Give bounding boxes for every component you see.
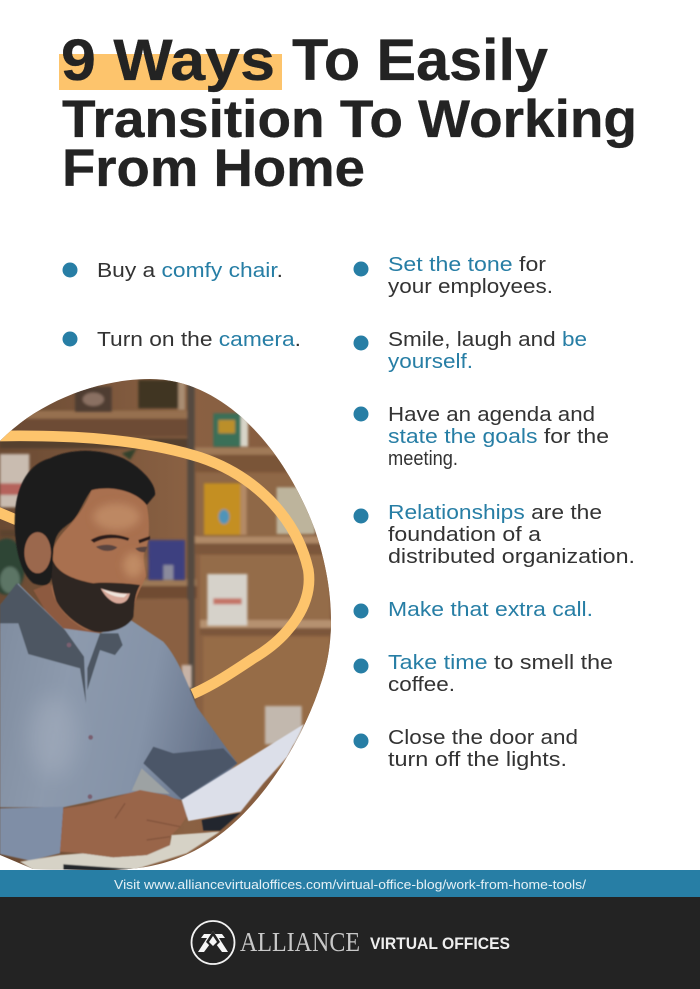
- tip: agenda: [354, 404, 609, 470]
- tip: relationships: distributed organization.: [388, 546, 635, 568]
- tip: relationships: foundation of a: [388, 524, 542, 546]
- url bar: [0, 870, 700, 897]
- smile: [101, 588, 130, 603]
- knuckle lines: [115, 803, 180, 840]
- tip: comfy chair: Buy a comfy chair .: [97, 260, 283, 282]
- shirt: [0, 583, 237, 807]
- eyes: [96, 545, 147, 552]
- tip: set the tone: Set the tone for: [388, 254, 546, 276]
- hand: [60, 790, 187, 857]
- title line 1 highlighted words: 9 Ways: [61, 28, 275, 93]
- neck: [34, 582, 98, 633]
- left tips list: [62, 260, 301, 351]
- shirt buttons: [67, 643, 93, 799]
- tip: agenda: Have an agenda and: [388, 404, 595, 426]
- blurred books: [0, 380, 315, 744]
- desk: [20, 832, 220, 870]
- forehead highlight: [93, 503, 140, 530]
- collar: [0, 583, 123, 703]
- title: [59, 28, 637, 198]
- title line 3: From Home: [62, 139, 365, 198]
- hair: [15, 451, 155, 585]
- tip: agenda: meeting.: [388, 448, 458, 470]
- tip: relationships: [354, 502, 635, 568]
- eyebrows: [91, 535, 150, 543]
- tip: be yourself: Smile, laugh and be: [388, 329, 587, 351]
- gap between arm and body: [132, 768, 170, 794]
- title line 1 remaining words: To Easily: [292, 28, 548, 93]
- right tips list: [354, 254, 635, 771]
- logo wordmark: Virtual Offices: VIRTUAL OFFICES: [370, 934, 510, 953]
- url text: Visit www.alliancevirtualoffices.com/virtual-office-blog/work-from-home-tools/: [114, 878, 587, 892]
- footer: [0, 897, 700, 989]
- tip: set the tone: [354, 254, 553, 298]
- beard: [51, 557, 140, 632]
- man: [0, 451, 304, 873]
- tip: agenda: state the goals for the: [388, 426, 609, 448]
- title line 2: Transition To Working: [62, 90, 637, 149]
- ear: [24, 532, 51, 573]
- tip: camera: Turn on the camera .: [97, 329, 301, 351]
- tip: smell the coffee: Take time to smell the: [388, 652, 613, 674]
- tip: close the door: turn off the lights.: [388, 749, 567, 771]
- paper: [182, 724, 304, 821]
- yellow swoosh line: [0, 436, 309, 694]
- logo wordmark: Alliance: ALLIANCE: [240, 927, 360, 957]
- logo icon: [192, 921, 234, 964]
- nose highlight: [123, 552, 143, 578]
- photo: man reading a document in front of bookshelves: [0, 370, 340, 880]
- notebook: [62, 864, 132, 870]
- sleeve cuff: [0, 807, 63, 861]
- tip: smell the coffee: [354, 652, 613, 696]
- shirt shading: [32, 703, 74, 770]
- bookshelf background: [0, 370, 340, 880]
- tip: close the door: [354, 727, 578, 771]
- tip: smell the coffee: coffee.: [388, 674, 455, 696]
- tip: set the tone: your employees.: [388, 276, 553, 298]
- face: [52, 488, 149, 631]
- dark jacket under paper: [202, 813, 241, 831]
- tip: extra call: Make that extra call.: [388, 599, 593, 621]
- shadowed arm: [143, 747, 237, 799]
- tip: close the door: Close the door and: [388, 727, 578, 749]
- tip: be yourself: yourself.: [388, 351, 473, 373]
- tip: relationships: Relationships are the: [388, 502, 602, 524]
- title highlight: [59, 54, 282, 90]
- tip: be yourself: [354, 329, 587, 373]
